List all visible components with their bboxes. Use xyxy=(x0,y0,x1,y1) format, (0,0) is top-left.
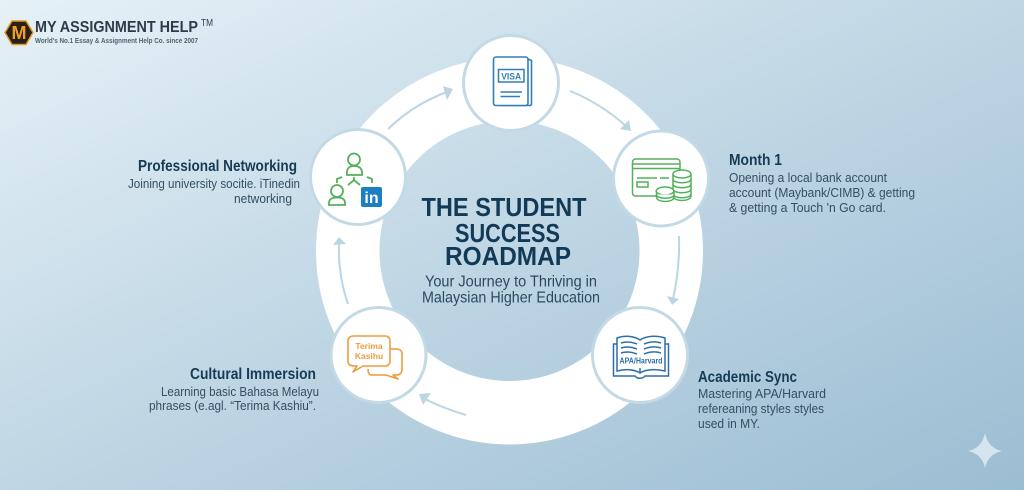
cycle ring xyxy=(348,89,671,413)
text: academic sync: Academic Sync xyxy=(698,369,797,386)
text: professional networking: networking xyxy=(234,191,292,206)
arrow: networking to visa xyxy=(388,86,453,129)
text: cultural immersion: Learning basic Bahasa Melayu xyxy=(161,384,319,399)
arrow: cultural immersion to networking xyxy=(333,237,348,304)
text: professional networking: Professional Networking xyxy=(138,158,297,175)
text: month 1: Month 1 xyxy=(729,152,782,169)
icon: open book: APA/Harvard xyxy=(620,356,663,366)
icon: card and coins xyxy=(632,159,691,202)
text: professional networking xyxy=(128,158,300,206)
logo name: MY ASSIGNMENT HELP xyxy=(35,19,198,36)
text: professional networking: Joining university socitie. iTinedin xyxy=(128,176,300,191)
icon: network and LinkedIn: in xyxy=(364,190,379,207)
logo xyxy=(5,18,213,45)
icon: logo hexagon: M xyxy=(12,23,26,43)
text: cultural immersion: Cultural Immersion xyxy=(190,366,316,383)
logo tagline: World's No.1 Essay & Assignment Help Co. since 2007 xyxy=(35,38,198,45)
title: SUCCESS xyxy=(455,220,560,248)
title: THE STUDENT xyxy=(422,194,587,222)
text: cultural immersion xyxy=(149,366,319,413)
icon: sparkle xyxy=(968,433,1002,468)
text: academic sync: Mastering APA/Harvard xyxy=(698,386,826,401)
text: month 1: account (Maybank/CIMB) & getting xyxy=(729,185,915,200)
subtitle xyxy=(422,274,600,306)
icon: speech bubbles xyxy=(348,336,402,379)
text: month 1: Opening a local bank account xyxy=(729,170,887,185)
icon: logo hexagon xyxy=(5,21,33,44)
subtitle: Malaysian Higher Education xyxy=(422,290,600,306)
icon: speech bubbles: Terima xyxy=(355,341,383,351)
icon: speech bubbles: Kasihu xyxy=(355,351,383,361)
text: month 1 xyxy=(729,152,915,215)
node: professional networking xyxy=(310,130,406,224)
node: cultural immersion xyxy=(331,308,426,402)
text: academic sync: refereaning styles styles xyxy=(698,401,824,416)
arrow: academic sync to cultural immersion xyxy=(419,393,466,415)
icon: visa passport: VISA xyxy=(501,72,522,82)
arrow: month 1 to academic sync xyxy=(667,236,679,305)
node: month 1 xyxy=(614,131,708,226)
subtitle: Your Journey to Thriving in xyxy=(425,274,597,290)
text: month 1: & getting a Touch 'n Go card. xyxy=(729,200,886,215)
node: visa xyxy=(464,36,558,130)
text: academic sync: used in MY. xyxy=(698,416,760,431)
trademark: TM xyxy=(201,18,213,29)
node: academic sync xyxy=(592,308,688,402)
arrow: visa to month 1 xyxy=(570,91,631,131)
text: academic sync xyxy=(698,369,826,431)
title: ROADMAP xyxy=(445,243,571,271)
title xyxy=(422,194,587,271)
text: cultural immersion: phrases (e.agl. “Terima Kashiu”. xyxy=(149,398,316,413)
